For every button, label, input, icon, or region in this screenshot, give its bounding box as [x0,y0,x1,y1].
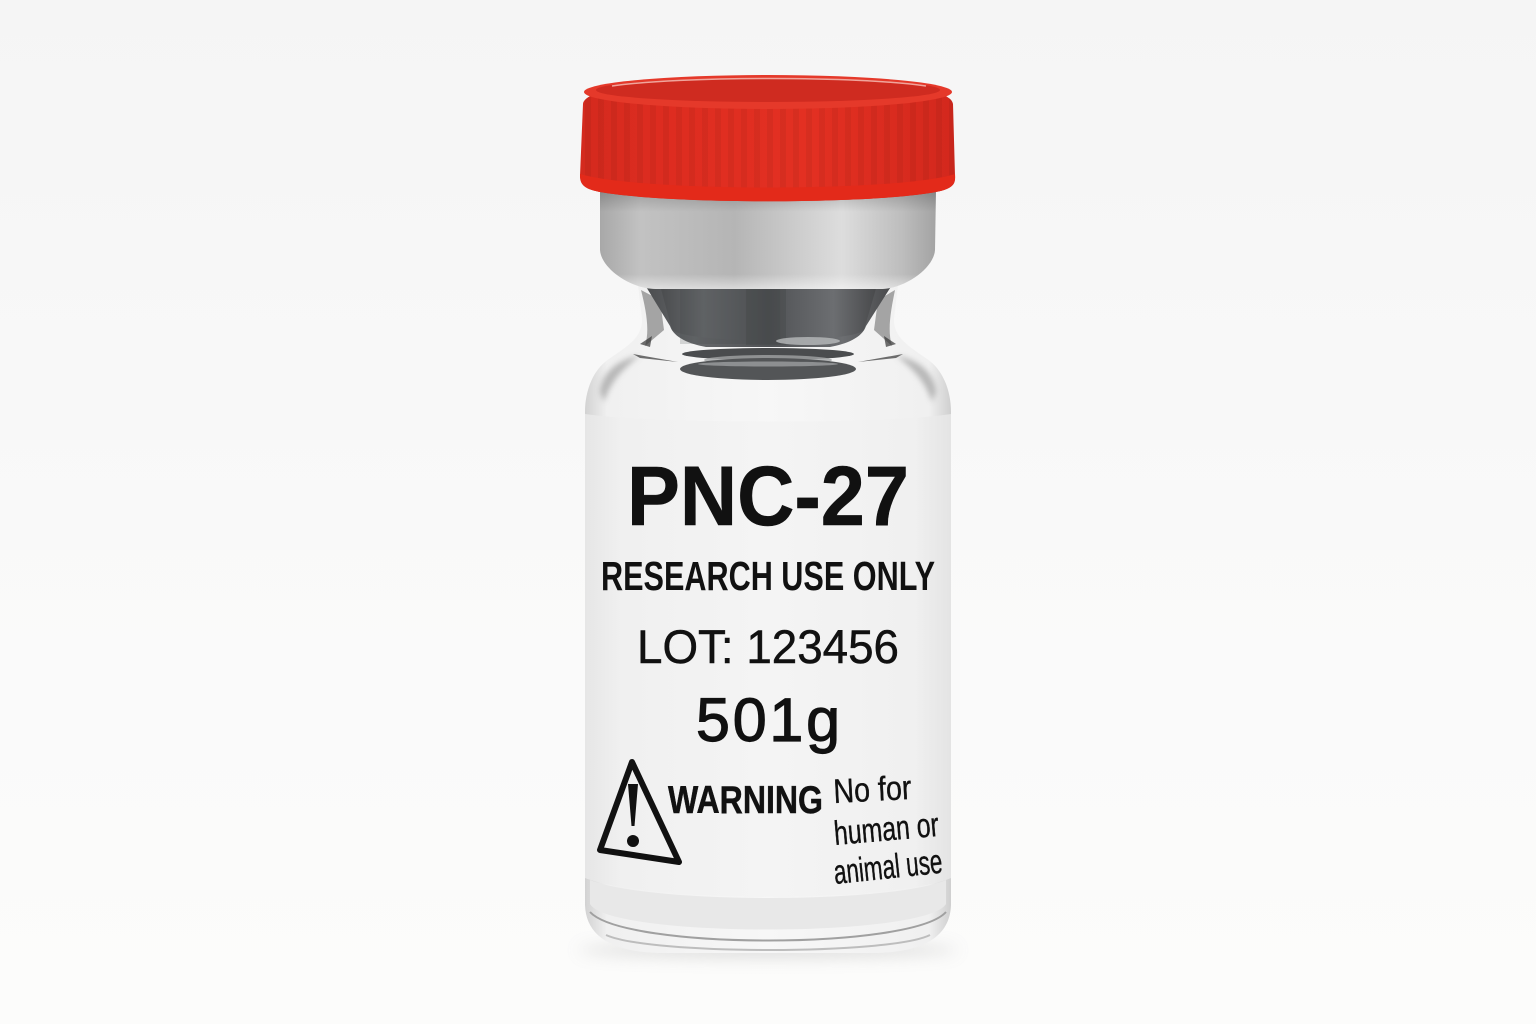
warning detail text [832,769,944,892]
vial base glass rings [590,912,946,950]
grey rubber stopper [645,285,892,380]
glass vial body [585,285,951,953]
red cap [580,75,955,201]
icon: warning triangle [600,762,679,862]
floor shadow [578,943,958,957]
warning detail text: human or [832,806,940,853]
warning detail text: No for [832,769,912,811]
paper label [585,414,951,897]
research use text: RESEARCH USE ONLY [601,553,935,599]
label title: PNC-27 [627,449,909,543]
quantity: 501g [696,686,840,754]
powder at bottom [590,880,946,930]
metal crimp [600,190,936,289]
lot number: LOT: 123456 [637,620,899,673]
shoulder highlights [600,355,640,402]
warning word: WARNING [668,779,823,822]
warning detail text: animal use [832,843,944,892]
